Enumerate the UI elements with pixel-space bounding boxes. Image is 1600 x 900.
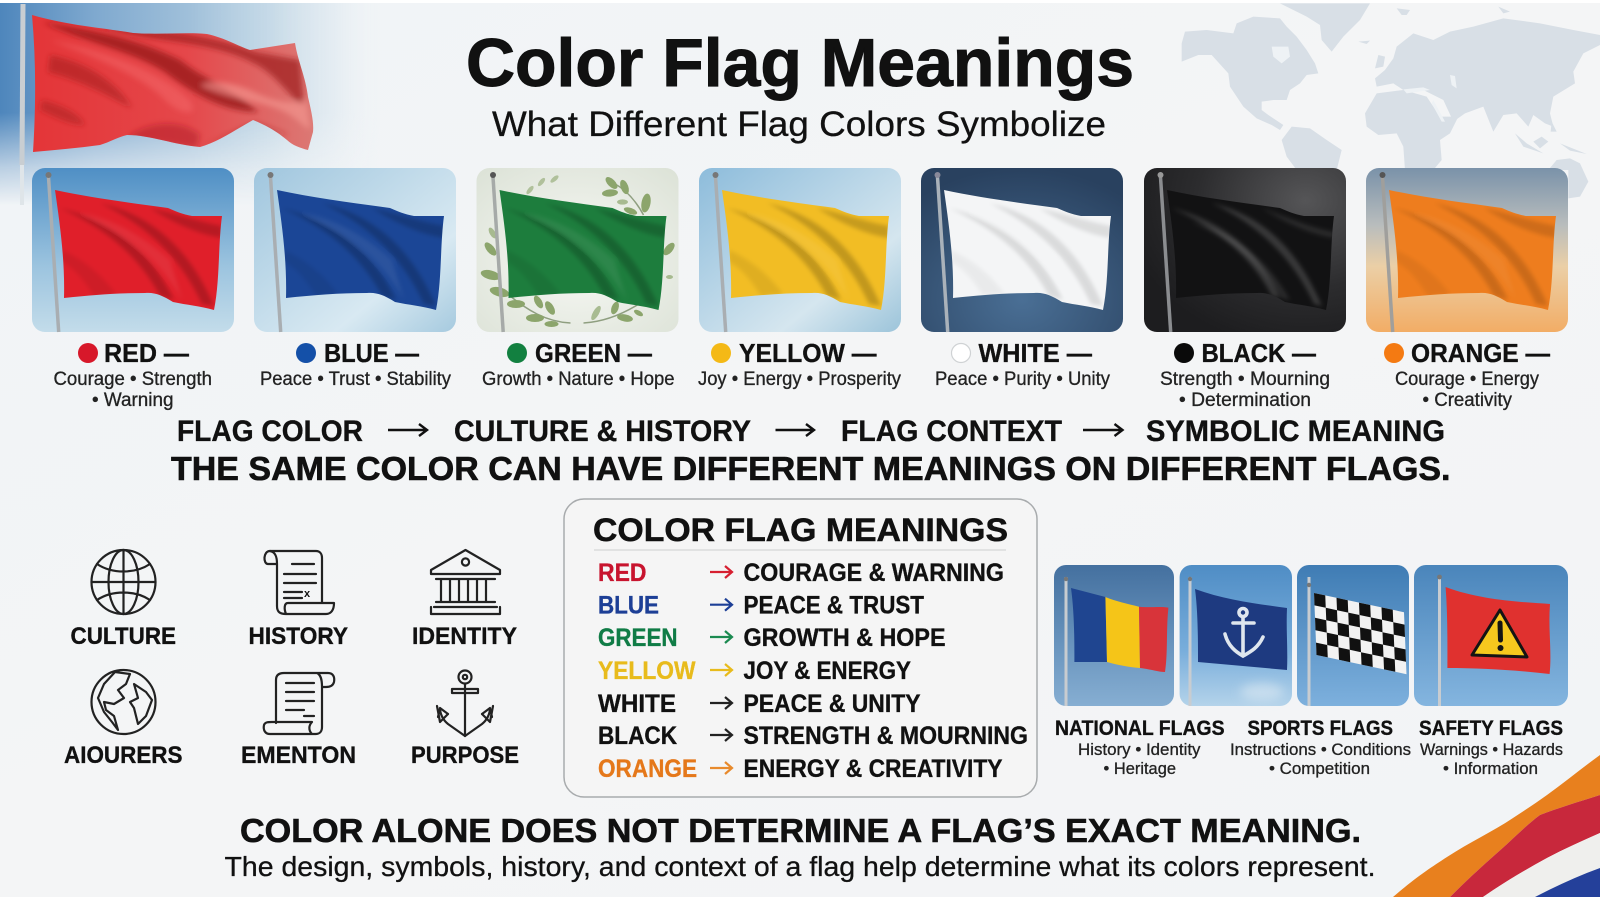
row: white: PEACE & UNITY	[744, 690, 921, 718]
arrow	[388, 424, 427, 436]
label: ementon: EMENTON	[241, 742, 356, 769]
title: Color Flag Meanings	[466, 25, 1134, 101]
row: yellow: YELLOW	[598, 657, 696, 685]
arrow	[1083, 424, 1122, 436]
bottom white band	[0, 897, 1600, 900]
label: history: HISTORY	[248, 623, 348, 650]
row: red	[598, 559, 1004, 587]
top-left sky wash	[0, 3, 346, 200]
icon: anchor	[437, 670, 493, 736]
row: black	[598, 722, 1028, 750]
panel: yellow flag card	[699, 168, 901, 332]
map inland seas	[1272, 47, 1457, 122]
row: black: BLACK	[598, 722, 677, 750]
caption: national flags: • Heritage	[1104, 759, 1176, 778]
label: black: BLACK —	[1202, 338, 1316, 368]
photo: anchor maritime flag	[1180, 565, 1292, 706]
corner ribbon flag	[1393, 755, 1600, 897]
row: red: COURAGE & WARNING	[744, 559, 1004, 587]
row: orange: ORANGE	[598, 755, 697, 783]
label: red: RED —	[104, 338, 189, 368]
world map backdrop	[1182, 3, 1600, 198]
top white band	[0, 0, 1600, 3]
label: yellow	[698, 338, 901, 390]
caption: safety flags: • Information	[1443, 759, 1538, 778]
icon: laurel leaves	[480, 174, 677, 327]
caption: national flags: History • Identity	[1078, 740, 1201, 759]
label: blue	[260, 338, 451, 390]
subtitle: What Different Flag Colors Symbolize	[492, 105, 1106, 144]
row: black: STRENGTH & MOURNING	[744, 722, 1028, 750]
label: white: WHITE —	[978, 338, 1092, 368]
label: identity: IDENTITY	[412, 623, 517, 650]
label: black: Strength • Mourning	[1160, 369, 1330, 390]
caption: sports flags	[1230, 717, 1411, 778]
row: white: WHITE	[598, 690, 676, 718]
row: green	[598, 624, 946, 652]
row: yellow	[598, 657, 911, 685]
icon: world globe	[92, 670, 156, 734]
row: red: RED	[598, 559, 646, 587]
caption: sports flags: Instructions • Conditions	[1230, 740, 1411, 759]
row: green: GROWTH & HOPE	[744, 624, 946, 652]
label: yellow: Joy • Energy • Prosperity	[698, 369, 901, 390]
footer heading: COLOR ALONE DOES NOT DETERMINE A FLAG’S EXACT MEANING.	[240, 812, 1361, 849]
heading: same color statement: THE SAME COLOR CAN HAVE DIFFERENT MEANINGS ON DIFFERENT FLAGS.	[171, 450, 1450, 487]
panel: red flag card	[32, 168, 234, 332]
photo: checkered sports flag	[1297, 565, 1409, 706]
flow: flag color to symbolic meaning	[177, 415, 1445, 448]
label: orange	[1384, 338, 1550, 411]
label: orange: Courage • Energy	[1395, 369, 1539, 390]
label: red: Courage • Strength	[54, 369, 212, 390]
label: red: • Warning	[92, 390, 174, 411]
label: blue: BLUE —	[324, 338, 419, 368]
table title: COLOR FLAG MEANINGS	[593, 512, 1008, 548]
icon: ementon scroll	[264, 673, 334, 734]
row: green: GREEN	[598, 624, 678, 652]
icon: white anchor	[1225, 608, 1263, 656]
label: white	[935, 338, 1110, 390]
label: red	[54, 338, 212, 411]
panel: color flag meanings table	[564, 499, 1037, 797]
label: aiourers: AIOURERS	[64, 742, 182, 769]
footer text: The design, symbols, history, and context of a flag help determine what its colors represent.	[224, 851, 1376, 882]
label: green: GREEN —	[535, 338, 652, 368]
label: green: Growth • Nature • Hope	[482, 369, 674, 390]
caption: sports flags: • Competition	[1269, 759, 1370, 778]
label: black	[1160, 338, 1330, 411]
icon: culture globe	[92, 550, 156, 614]
label: orange: • Creativity	[1422, 390, 1512, 411]
photo: hazard safety flag	[1414, 565, 1568, 706]
icon: history scroll	[264, 551, 334, 614]
caption: safety flags: SAFETY FLAGS	[1419, 717, 1563, 740]
row: yellow: JOY & ENERGY	[744, 657, 911, 685]
flow: flag color to symbolic meaning: SYMBOLIC MEANING	[1146, 415, 1445, 448]
label: purpose: PURPOSE	[411, 742, 519, 769]
label: black: • Determination	[1179, 390, 1311, 411]
panel: black flag card	[1144, 168, 1346, 332]
panel: green flag card	[476, 168, 678, 332]
label: green	[482, 338, 674, 390]
row: blue	[598, 592, 924, 620]
arrow	[776, 424, 814, 436]
row: orange: ENERGY & CREATIVITY	[744, 755, 1003, 783]
caption: national flags: NATIONAL FLAGS	[1055, 717, 1224, 740]
row: blue: PEACE & TRUST	[744, 592, 924, 620]
panel: white flag card	[921, 168, 1123, 332]
row: white	[598, 690, 921, 718]
hero red flag	[22, 4, 313, 205]
label: white: Peace • Purity • Unity	[935, 369, 1110, 390]
flow: flag color to symbolic meaning: FLAG COLOR	[177, 415, 363, 448]
icon: history scroll: x	[304, 588, 311, 600]
label: yellow: YELLOW —	[739, 338, 876, 368]
row: orange	[598, 755, 1003, 783]
flow: flag color to symbolic meaning: FLAG CONTEXT	[841, 415, 1062, 448]
caption: safety flags: Warnings • Hazards	[1420, 740, 1563, 759]
clouds	[1240, 683, 1284, 701]
label: blue: Peace • Trust • Stability	[260, 369, 451, 390]
panel: blue flag card	[254, 168, 456, 332]
icon: identity building	[431, 550, 500, 614]
caption: sports flags: SPORTS FLAGS	[1248, 717, 1393, 740]
label: orange: ORANGE —	[1411, 338, 1550, 368]
photo: tricolor national flag	[1054, 565, 1174, 706]
caption: safety flags	[1419, 717, 1563, 778]
panel: orange flag card	[1366, 168, 1568, 332]
caption: national flags	[1055, 717, 1224, 778]
icon: warning triangle	[1472, 610, 1527, 657]
label: culture: CULTURE	[70, 623, 176, 650]
flow: flag color to symbolic meaning: CULTURE & HISTORY	[454, 415, 751, 448]
row: blue: BLUE	[598, 592, 659, 620]
